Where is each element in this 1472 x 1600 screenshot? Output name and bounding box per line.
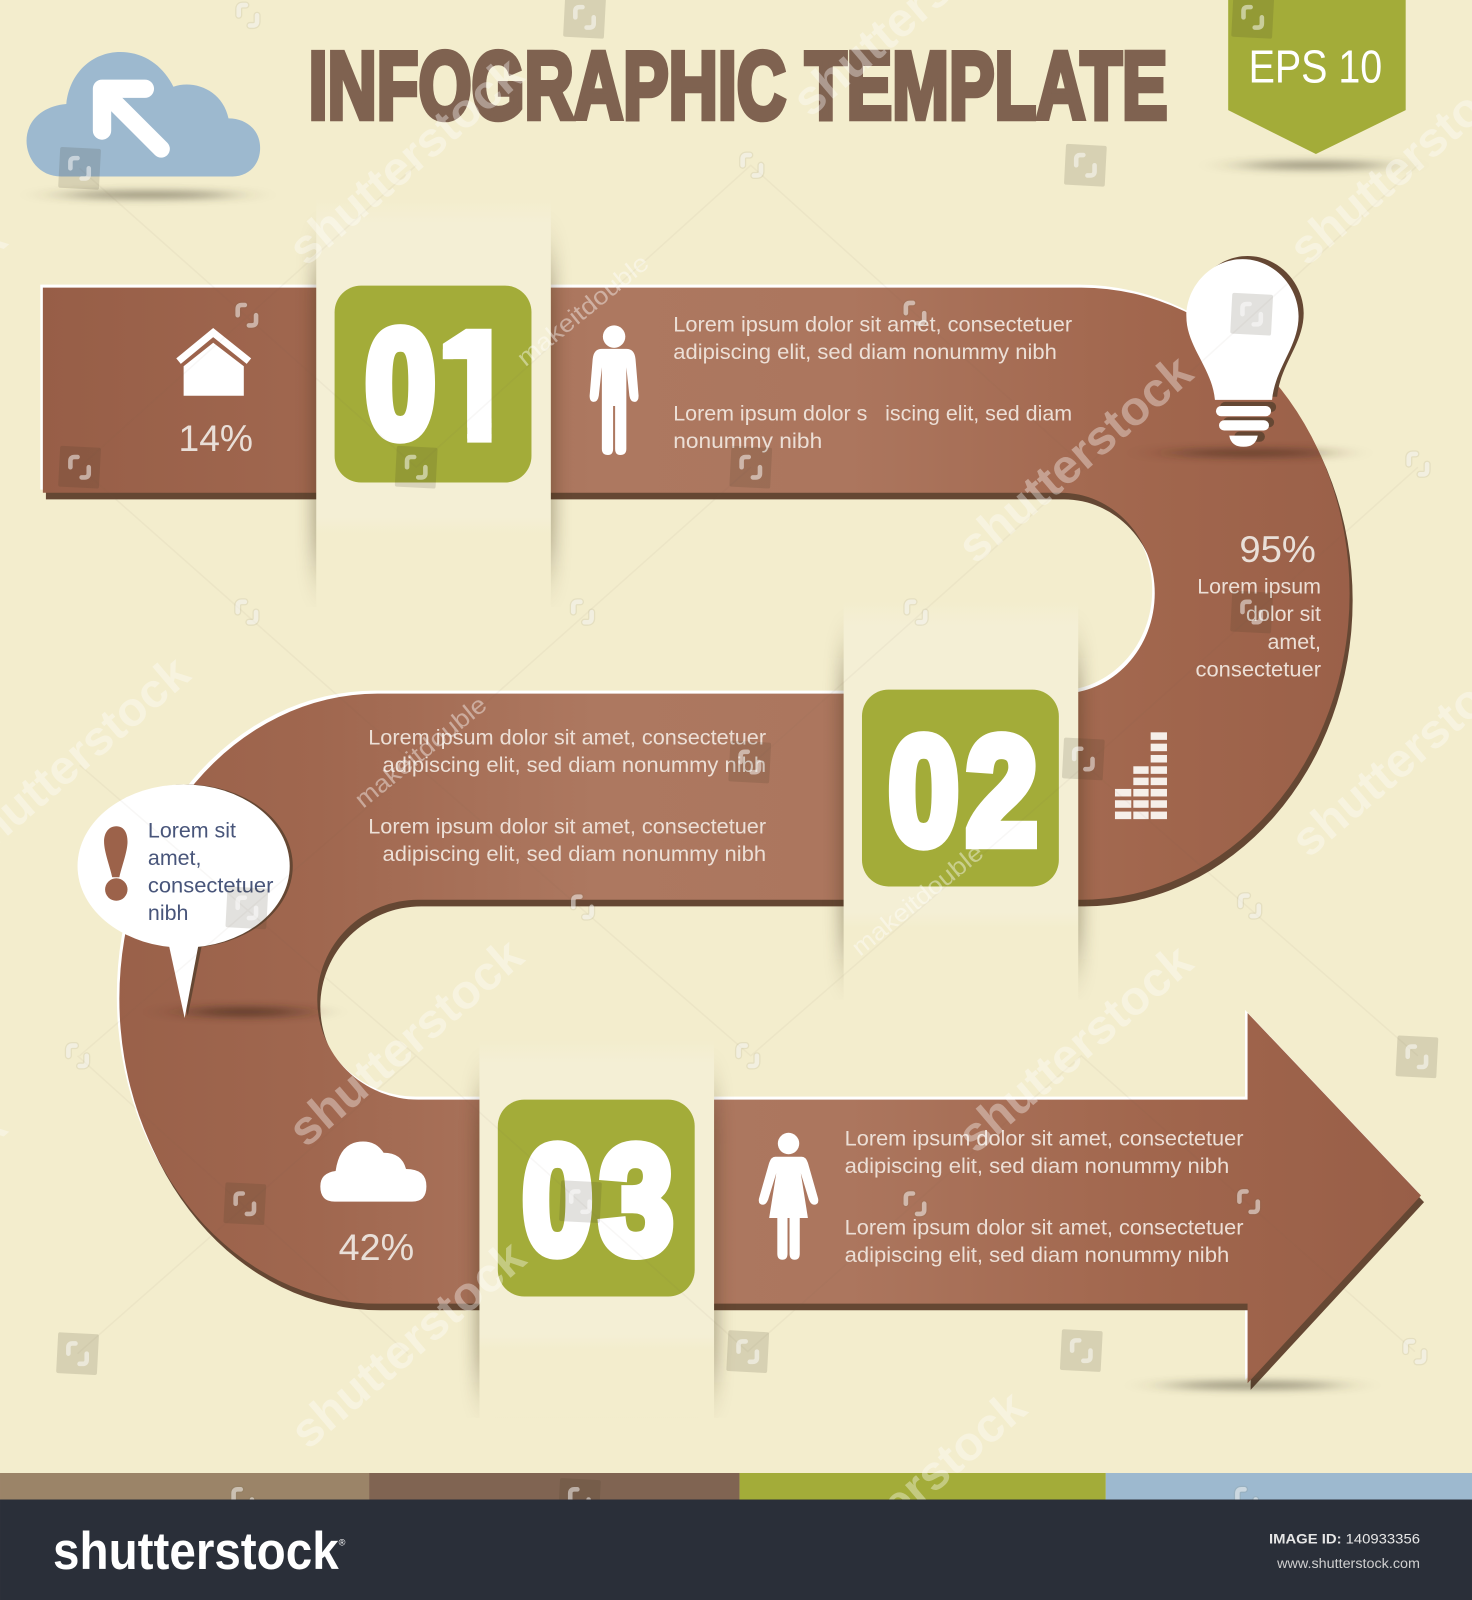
text block: step 01: Lorem ipsum dolor sit amet, consectetuer [673,313,1072,337]
icon: bar chart [1115,732,1167,819]
text block: right curve: dolor sit [1246,602,1321,626]
step 02 number badge: 0 [889,706,959,877]
stat 14%: 14% [179,418,253,459]
icon: white cloud [320,1141,426,1202]
icon: woman [759,1133,818,1260]
icon: house [179,333,249,396]
watermarks: shutterstock [279,47,534,276]
callout text: Lorem sit [148,818,236,842]
text block: right curve: consectetuer [1196,657,1321,681]
watermarks: shutterstock [281,1230,536,1459]
text block: right curve: amet, [1267,630,1321,654]
callout text: amet, [148,846,201,870]
callout: speech bubble [78,784,304,1018]
website: www.shutterstock.com [1276,1556,1420,1572]
panel: strip 02 [840,602,1082,1000]
text block: step 03: Lorem ipsum dolor sit amet, consectetuer [845,1215,1243,1239]
icon: light bulb [1168,256,1331,457]
callout text: nibh [148,901,188,925]
step 02 number badge: 2 [966,706,1037,877]
step 03 number badge: 0 [522,1115,593,1286]
text block: step 01 [673,313,1072,453]
stat 95%: 95% [1239,529,1316,570]
panel: strip 03 [475,1040,718,1418]
step 02 number badge [862,690,1059,886]
watermarks: makeitdouble [512,249,654,372]
text block: step 03 [845,1127,1243,1267]
text block: right curve: Lorem ipsum [1197,575,1321,599]
step 01 number badge: 1 [430,301,516,472]
text block: step 02: adipiscing elit, sed diam nonummy nibh [383,753,766,777]
badge: EPS 10 [1228,0,1406,169]
text block: step 03: adipiscing elit, sed diam nonummy nibh [845,1243,1229,1267]
image id: IMAGE ID: 140933356 [1269,1531,1420,1547]
text block: step 02: Lorem ipsum dolor sit amet, consectetuer [368,814,766,838]
step 01 number badge: 0 [365,299,436,470]
text block: right curve [1196,575,1321,681]
step 01 number badge [335,286,531,482]
watermarks: makeitdouble [847,839,989,962]
step 03 number badge [498,1100,695,1297]
text block: step 02 [368,726,766,866]
icon: man [590,325,639,455]
footer bar [0,1500,1472,1600]
callout text: consectetuer [148,874,273,898]
watermarks: shutterstock [948,934,1203,1163]
registered mark: ® [339,1537,346,1547]
icon: blue cloud with arrow [27,52,260,199]
footer logo: shutterstock [53,1522,339,1581]
watermarks: shutterstock [948,345,1203,573]
text block: step 03: adipiscing elit, sed diam nonummy nibh [845,1154,1229,1178]
text block: step 03: Lorem ipsum dolor sit amet, consectetuer [845,1127,1243,1151]
text block: step 02: adipiscing elit, sed diam nonummy nibh [383,842,766,866]
badge: EPS 10: EPS 10 [1249,41,1382,93]
text block: step 02: Lorem ipsum dolor sit amet, consectetuer [368,726,766,750]
callout text [148,818,273,925]
watermarks: shutterstock [279,928,534,1157]
panel: strip 01 [312,199,555,607]
text block: step 01: adipiscing elit, sed diam nonummy nibh [673,340,1057,364]
arrow ground shadow [1166,1381,1339,1389]
text block: step 01: Lorem ipsum dolor s iscing elit, sed diam [673,401,1072,425]
stat 42%: 42% [339,1227,414,1268]
step 03 number badge: 3 [600,1115,673,1286]
text block: step 01: nonummy nibh [673,429,822,453]
icon: exclamation mark [104,826,128,901]
footer colour bands [0,1473,1472,1501]
ribbon arrow [40,285,1424,1390]
watermarks: makeitdouble [350,691,492,814]
